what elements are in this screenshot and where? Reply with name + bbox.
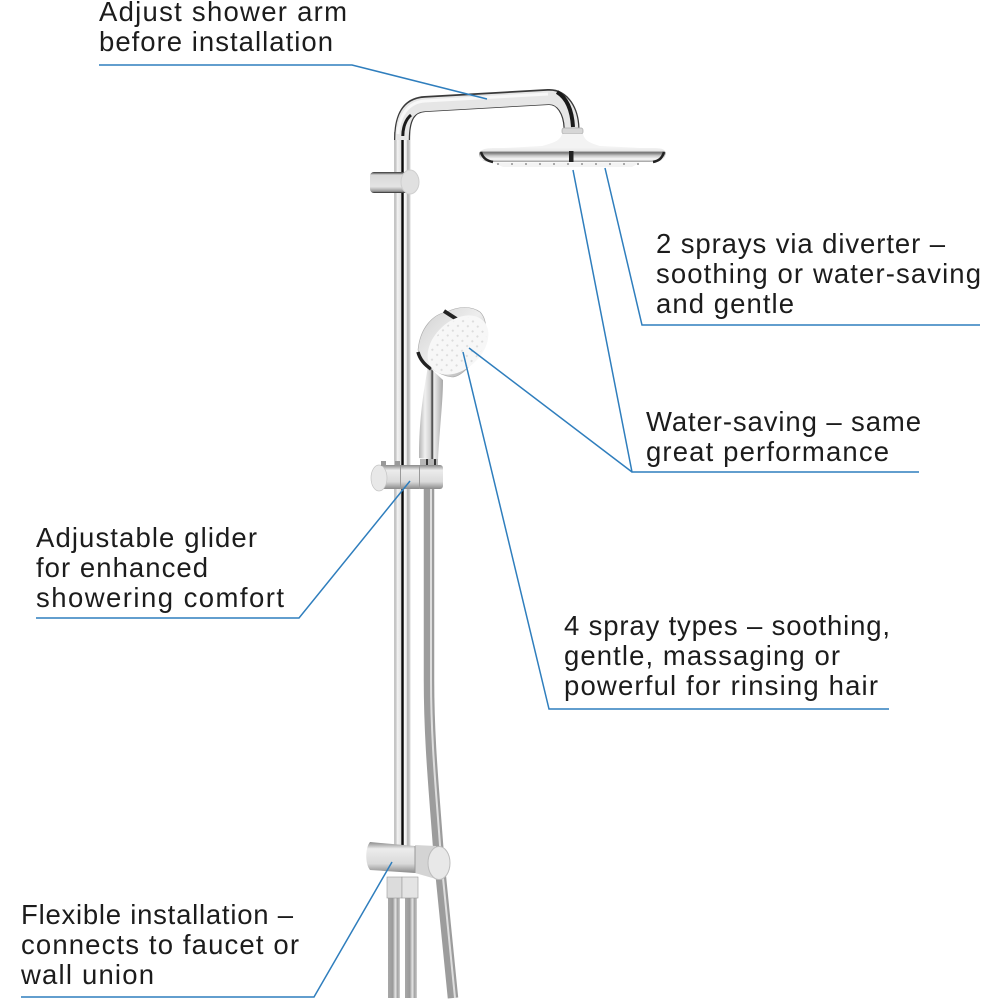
hand shower hose <box>429 489 455 998</box>
callout text: flexible installation: Flexible installation – <box>21 899 294 930</box>
callout text: overhead sprays: soothing or water-saving <box>656 258 981 289</box>
handle collar <box>420 459 438 466</box>
callout text: overhead sprays: 2 sprays via diverter – <box>656 228 946 259</box>
callout: spray types <box>463 352 890 709</box>
callout text: shower arm: before installation <box>99 26 333 57</box>
overhead shower head <box>479 148 666 167</box>
upper arm sheen <box>398 94 548 134</box>
nozzle row <box>493 162 640 167</box>
callout text: spray types: powerful for rinsing hair <box>564 670 878 701</box>
callout: shower arm <box>99 0 487 99</box>
callout text: spray types: 4 spray types – soothing, <box>564 610 890 641</box>
lower hoses <box>387 877 418 998</box>
rail clamp <box>370 170 419 194</box>
callout: glider <box>36 481 410 618</box>
arm elbow dark reflection <box>557 92 573 127</box>
callout text: glider: Adjustable glider <box>36 522 257 553</box>
overhead shower white cap <box>486 134 660 149</box>
wall union connector <box>366 842 450 880</box>
callout text: flexible installation: connects to faucet or <box>21 929 299 960</box>
callout: overhead sprays <box>605 168 981 325</box>
overhead shower connector <box>562 128 583 134</box>
shower column product <box>366 92 666 998</box>
hand shower handle <box>419 366 443 460</box>
callout text: flexible installation: wall union <box>20 959 154 990</box>
upper arm outline <box>402 97 572 140</box>
rail bend dark reflection <box>403 115 411 136</box>
callout: water-saving <box>469 170 921 472</box>
callout text: water-saving: great performance <box>646 436 889 467</box>
hand shower head <box>416 304 500 386</box>
callout text: overhead sprays: and gentle <box>656 288 794 319</box>
callout: flexible installation <box>20 862 392 997</box>
callout text: water-saving: Water-saving – same <box>646 406 921 437</box>
vertical riser rail <box>394 132 410 848</box>
callout text: spray types: gentle, massaging or <box>564 640 840 671</box>
callout text: glider: for enhanced <box>36 552 208 583</box>
upper arm highlight <box>402 97 572 140</box>
callout text: glider: showering comfort <box>36 582 284 613</box>
adjustable glider <box>371 461 443 491</box>
